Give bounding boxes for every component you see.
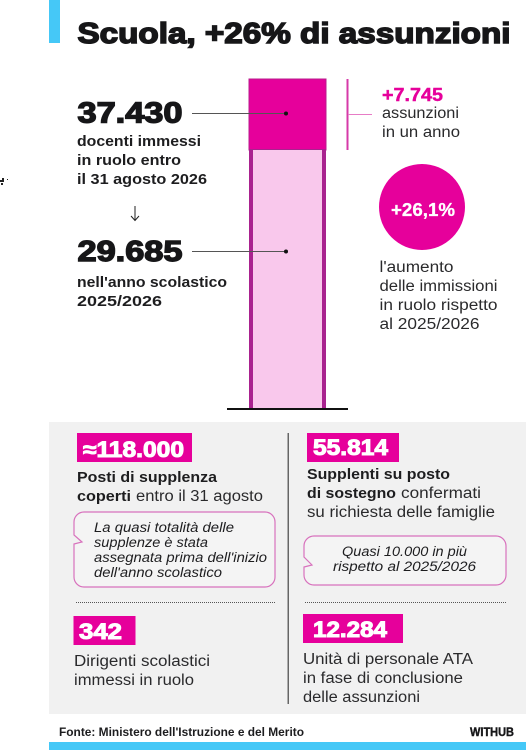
stat: support substitutes: di sostegno xyxy=(307,485,396,502)
speech bubble: substitutes note: assegnata prima dell'inizio xyxy=(94,550,268,565)
stat: ATA staff: delle assunzioni xyxy=(303,689,420,706)
figure: 29.685 teachers xyxy=(77,236,288,310)
stat: support substitutes: Supplenti su posto xyxy=(307,466,450,483)
figure: 37.430 teachers xyxy=(77,98,288,188)
speech bubble: substitutes note: La quasi totalità delle xyxy=(94,520,234,535)
speech bubble: support note: Quasi 10.000 in più xyxy=(342,544,468,559)
stat: school heads xyxy=(74,616,210,689)
text: increase description: in ruolo rispetto xyxy=(380,297,498,314)
speech bubble: substitutes note: dell'anno scolastico xyxy=(94,565,223,580)
bottom accent bar xyxy=(49,742,526,750)
arrow down xyxy=(131,206,139,220)
figure: 37.430 teachers: in ruolo entro xyxy=(77,152,181,169)
figure: 29.685 teachers: 2025/2026 xyxy=(77,293,162,310)
figure: 37.430 teachers: il 31 agosto 2026 xyxy=(77,171,207,188)
stat: support substitutes: 55.814 xyxy=(313,435,389,460)
stray specks xyxy=(0,178,8,185)
stat: support substitutes: su richiesta delle famiglie xyxy=(307,504,495,521)
stat: school heads: Dirigenti scolastici xyxy=(74,653,210,670)
stacked bar chart xyxy=(227,79,348,410)
top accent bar xyxy=(49,0,60,43)
stat: ATA staff xyxy=(303,614,474,706)
callout: +7.745: assunzioni xyxy=(382,105,459,122)
source: Fonte: Ministero dell'Istruzione e del Merito xyxy=(59,727,304,739)
figure: 37.430 teachers: 37.430 xyxy=(78,98,182,130)
stat: school heads: 342 xyxy=(79,619,122,644)
stat: ATA staff: Unità di personale ATA xyxy=(303,651,474,668)
callout: +7.745: +7.745 xyxy=(382,84,443,105)
stat: substitute posts xyxy=(77,433,263,505)
figure: 29.685 teachers: 29.685 xyxy=(78,236,182,268)
circle: +26,1%: +26,1% xyxy=(391,199,455,220)
stat: substitute posts: coperti xyxy=(77,488,131,505)
stat: ATA staff: in fase di conclusione xyxy=(303,670,463,687)
stat: substitute posts: Posti di supplenza xyxy=(77,469,218,486)
stat: substitute posts: ≈118.000 xyxy=(83,437,184,462)
circle: +26,1% xyxy=(379,164,465,250)
text: increase description: al 2025/2026 xyxy=(380,316,480,333)
title: Scuola, +26% di assunzioni xyxy=(78,18,510,50)
stat: ATA staff: 12.284 xyxy=(313,617,388,642)
stat: support substitutes: confermati xyxy=(401,485,481,502)
figure: 29.685 teachers: nell'anno scolastico xyxy=(77,274,227,291)
callout: +7.745: in un anno xyxy=(382,124,460,141)
stat: support substitutes xyxy=(307,433,495,521)
text: increase description xyxy=(380,259,498,333)
speech bubble: support note: rispetto al 2025/2026 xyxy=(333,559,477,574)
speech bubble: support note xyxy=(304,536,506,585)
brand: WITHUB xyxy=(470,727,514,739)
stat: school heads: immessi in ruolo xyxy=(74,672,194,689)
figure: 37.430 teachers: docenti immessi xyxy=(77,133,201,150)
speech bubble: substitutes note xyxy=(74,512,275,587)
stat: substitute posts: entro il 31 agosto xyxy=(136,488,263,505)
panel: staff details xyxy=(49,422,526,714)
speech bubble: substitutes note: supplenze è stata xyxy=(94,535,209,550)
text: increase description: l'aumento xyxy=(380,259,454,276)
callout: +7.745 xyxy=(346,79,460,150)
text: increase description: delle immissioni xyxy=(380,278,498,295)
